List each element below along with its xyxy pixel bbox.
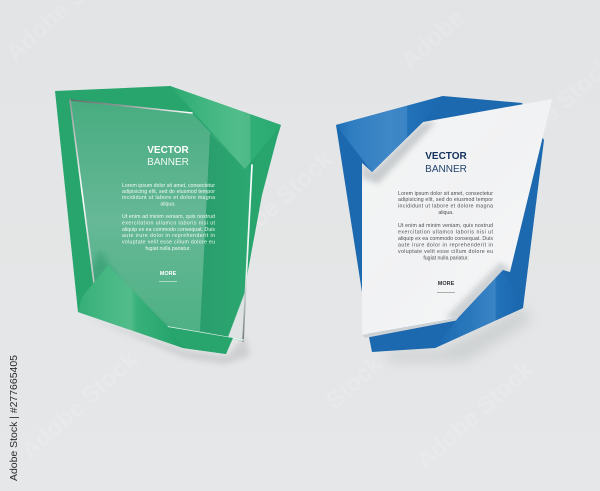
blue banner body text: fugiat nulla pariatur. bbox=[423, 256, 469, 262]
green banner body text bbox=[122, 183, 216, 252]
blue banner body text bbox=[398, 191, 494, 262]
paper edge bottom bbox=[362, 318, 459, 338]
watermark: faint Adobe Stock text: Adobe Stock bbox=[16, 346, 144, 464]
green banner body text: Ut enim ad minim veniam, quis nostrud bbox=[122, 214, 215, 220]
green banner bbox=[55, 86, 281, 364]
green banner more link: MORE bbox=[160, 271, 177, 277]
green banner more link bbox=[159, 271, 177, 282]
blue banner body text: aliqua. bbox=[438, 210, 454, 216]
soft fold shadows on paper bbox=[362, 122, 512, 322]
blue banner body text: voluptate velit esse cillum dolore eu bbox=[398, 249, 493, 255]
blue banner body text: adipisicing elit, sed do eiusmod tempor bbox=[398, 197, 493, 203]
stock id caption: Adobe Stock | #277665405 bbox=[8, 355, 20, 481]
light gap inside the frame outside the green backing bbox=[228, 290, 246, 339]
blue folded backing shape bbox=[336, 96, 544, 352]
blue banner body text: exercitation ullamco laboris nisi ut bbox=[398, 230, 494, 236]
darker right band of glass bbox=[200, 133, 252, 337]
blue banner bbox=[336, 96, 552, 362]
blue banner body text: aliquip ex ea commodo consequat. Duis bbox=[398, 236, 493, 242]
green banner body text: exercitation ullamco laboris nisi ut bbox=[122, 220, 216, 226]
blue banner body text: incididunt ut labore et dolore magna bbox=[398, 204, 493, 210]
blue banner heading: VECTOR bbox=[425, 151, 468, 162]
blue banner heading bbox=[425, 151, 468, 175]
white paper sheet bbox=[362, 99, 552, 335]
green banner body text: aliquip ex ea commodo consequat. Duis bbox=[122, 227, 215, 233]
blue banner more link bbox=[437, 281, 455, 293]
blue banner body text: aute irure dolor in reprehenderit in bbox=[398, 242, 493, 248]
top left corner fold bbox=[336, 96, 443, 172]
green banner body text: aute irure dolor in reprehenderit in bbox=[122, 233, 215, 239]
blue banner body text: Lorem ipsum dolor sit amet, consectetur bbox=[398, 191, 493, 197]
blue banner body text: Ut enim ad minim veniam, quis nostrud bbox=[398, 223, 493, 229]
lower right corner fold bbox=[435, 270, 523, 348]
watermark: faint Adobe Stock text: Adobe Stock bbox=[211, 146, 339, 264]
watermark: faint Adobe Stock text: Stock bbox=[321, 350, 388, 414]
glass panel bbox=[70, 100, 252, 341]
green banner heading bbox=[147, 145, 190, 168]
green banner body text: voluptate velit esse cillum dolore eu bbox=[122, 240, 215, 246]
drop shadow under blue banner bbox=[385, 306, 530, 362]
green banner body text: Lorem ipsum dolor sit amet, consectetur bbox=[122, 183, 215, 189]
watermark: faint Adobe Stock text: Adobe Stock bbox=[411, 356, 539, 474]
blue banner more link: MORE bbox=[438, 281, 455, 287]
top right corner fold bbox=[170, 86, 281, 169]
silver frame edges bbox=[70, 100, 252, 341]
green banner body text: incididunt ut labore et dolore magna bbox=[122, 195, 215, 201]
lower left corner fold bbox=[78, 265, 183, 348]
blue banner heading: BANNER bbox=[425, 164, 467, 175]
green banner heading: VECTOR bbox=[147, 145, 190, 156]
soft shade on glass left edge bbox=[92, 251, 165, 324]
bottom green strip bbox=[168, 327, 233, 354]
green banner body text: aliqua. bbox=[160, 202, 176, 208]
green banner body text: adipisicing elit, sed do eiusmod tempor bbox=[122, 189, 215, 195]
green folded backing shape bbox=[55, 86, 281, 354]
green banner body text: fugiat nulla pariatur. bbox=[145, 246, 191, 252]
watermark: faint Adobe Stock text: Adobe bbox=[396, 4, 470, 74]
green banner heading: BANNER bbox=[147, 157, 189, 168]
drop shadow under green banner bbox=[85, 316, 250, 364]
